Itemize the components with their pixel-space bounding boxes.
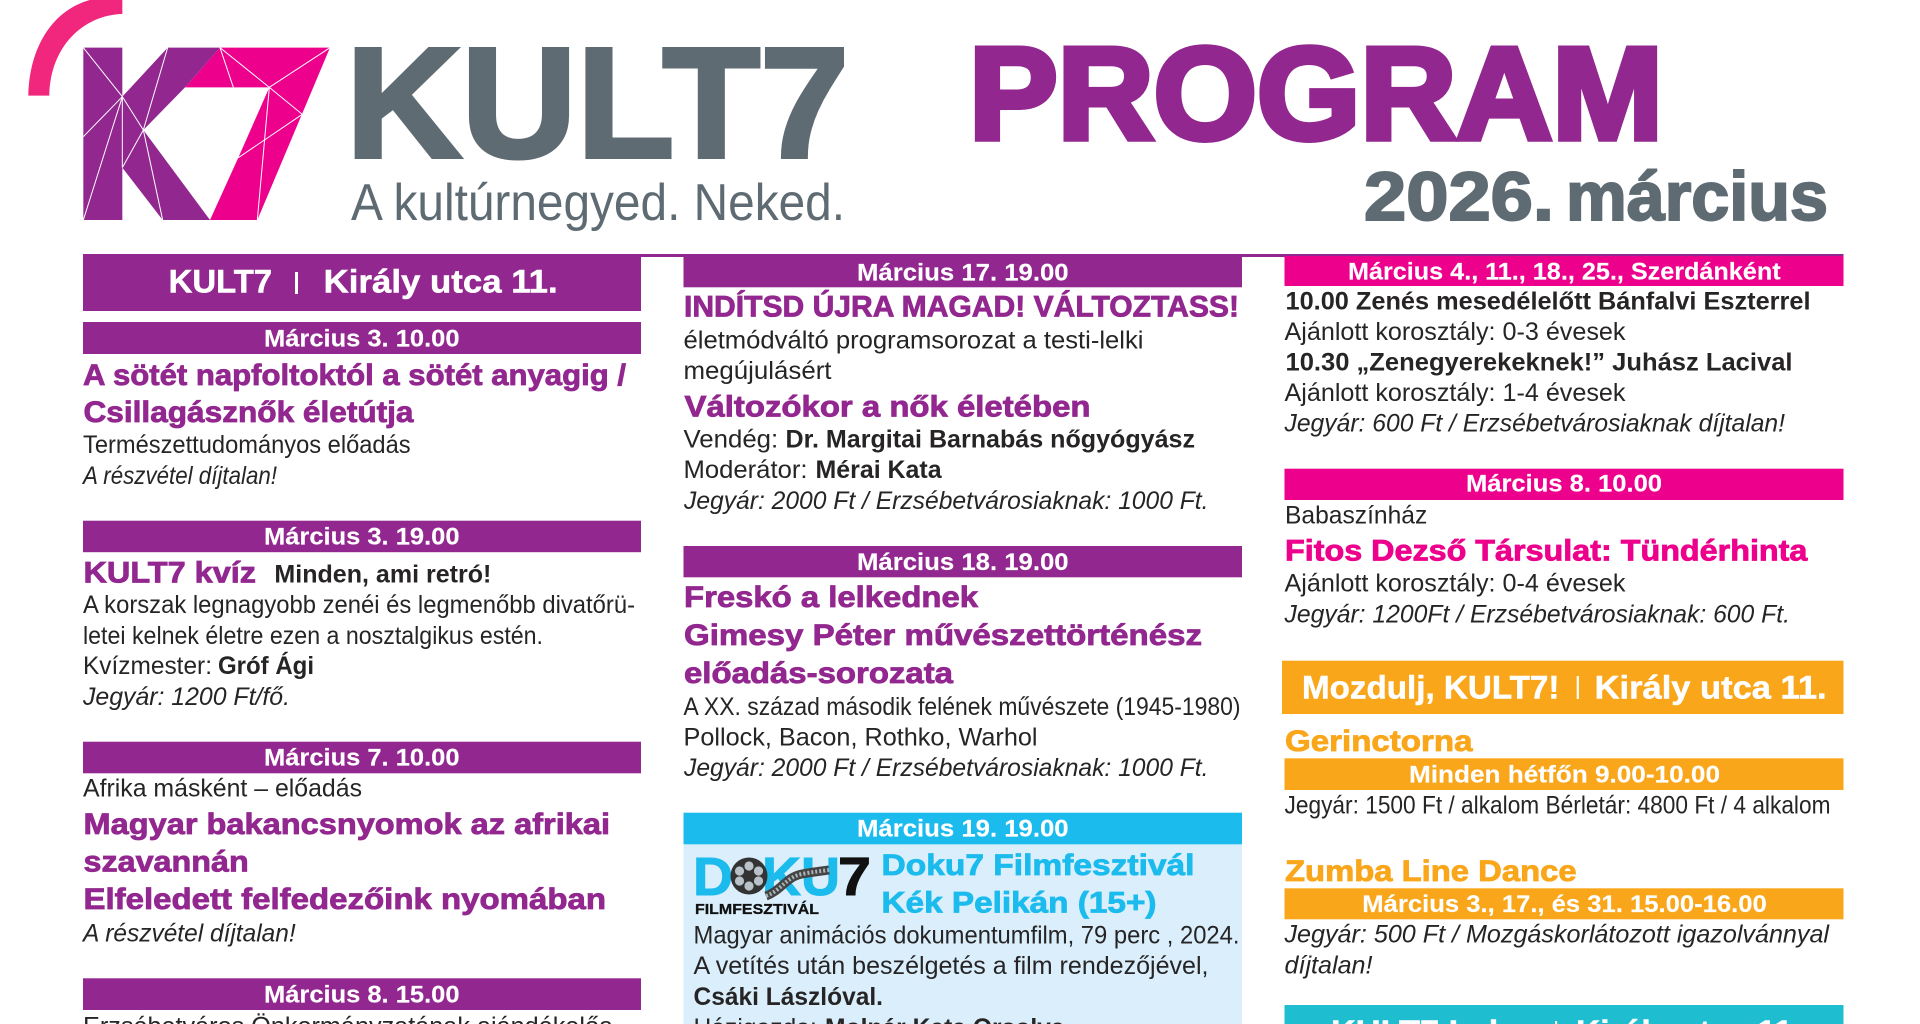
event: március 7. 10.00: Elfeledett felfedezőink nyomában [84,883,606,916]
event: március 17. 19.00: Március 17. 19.00 [857,260,1069,287]
venue header: Király utca 11. [324,264,558,300]
event: március 19. 19.00 Doku7 [684,813,1242,1024]
event: március 3. 10.00: A sötét napfoltoktól a sötét anyagig / [83,359,627,392]
event: szerdánként: Ajánlott korosztály: 0-3 évesek [1284,318,1626,346]
top rule [83,254,1844,257]
event: március 3. 19.00: Március 3. 19.00 [264,524,460,551]
panel: column 1 KULT7 programs [81,254,641,1024]
icon: Doku7 film festival logo: KU [762,847,840,907]
event: szerdánként: 10.30 „Zenegyerekeknek!” Juhász Lacival [1286,349,1792,377]
event: március 17. 19.00: Moderátor: [684,456,808,484]
event: szerdánként: 10.00 Zenés mesedélelőtt Bánfalvi Eszterrel [1286,287,1810,315]
event: Gerinctorna [1284,725,1844,819]
event: március 17. 19.00: Jegyár: 2000 Ft / Erzsébetvárosiaknak: 1000 Ft. [683,487,1208,515]
event: március 18. 19.00: Jegyár: 2000 Ft / Erzsébetvárosiaknak: 1000 Ft. [683,754,1208,782]
event: március 19. 19.00 Doku7: Kék Pelikán (15+) [882,887,1156,920]
event: március 8. 10.00: Jegyár: 1200Ft / Erzsébetvárosiaknak: 600 Ft. [1284,600,1790,628]
event: március 3. 19.00: Gróf Ági [218,651,314,680]
event: szerdánként: Jegyár: 600 Ft / Erzsébetvárosiaknak díjtalan! [1284,410,1785,438]
event: Zumba Line Dance: díjtalan! [1284,951,1373,979]
venue header [83,254,641,311]
event: március 3. 10.00: Csillagásznők életútja [84,396,414,429]
icon: Doku7 film festival logo [693,847,871,918]
title: PROGRAM: PROGRAM [969,20,1663,167]
event: március 7. 10.00: Március 7. 10.00 [264,745,460,772]
section header: Mozdulj, KULT7!: Mozdulj, KULT7! [1302,669,1559,705]
event: Zumba Line Dance: Jegyár: 500 Ft / Mozgáskorlátozott igazolvánnyal [1283,921,1830,949]
event: Zumba Line Dance: Március 3., 17., és 31. 15.00-16.00 [1362,891,1767,918]
panel: column 2 programs [683,254,1242,1024]
section header: KULT7 Labor [1284,1005,1844,1024]
event: Gerinctorna: Jegyár: 1500 Ft / alkalom Bérletár: 4800 Ft / 4 alkalom [1284,791,1830,819]
event: március 3. 19.00: Jegyár: 1200 Ft/fő. [82,683,290,711]
event: március 19. 19.00 Doku7: Csáki Lászlóval. [694,983,883,1011]
event: március 3. 19.00: Minden, ami retró! [274,560,491,588]
event: szerdánként [1284,256,1844,438]
event: március 7. 10.00: Magyar bakancsnyomok az afrikai [84,808,610,841]
logo tagline: A kultúrnegyed. Neked. [351,174,845,232]
event: március 18. 19.00: Freskó a lelkednek [684,581,978,614]
event: szerdánként: Március 4., 11., 18., 25., Szerdánként [1348,258,1781,285]
event: március 3. 19.00: KULT7 kvíz [84,556,256,589]
event: március 19. 19.00 Doku7: Március 19. 19.00 [857,816,1069,843]
event: március 17. 19.00: Mérai Kata [816,456,943,484]
subtitle: 2026. március: március [1566,158,1828,235]
event: március 17. 19.00: megújulásért [684,357,832,385]
event: március 7. 10.00: Afrika másként – előadás [83,775,362,803]
event: Zumba Line Dance [1283,855,1844,979]
event: március 8. 10.00: Babaszínház [1285,501,1427,529]
event: március 8. 10.00: Fitos Dezső Társulat: Tündérhinta [1285,535,1808,568]
event: március 17. 19.00: INDÍTSD ÚJRA MAGAD! VÁLTOZTASS! [684,290,1239,324]
event: március 18. 19.00: előadás-sorozata [684,657,953,690]
event: március 18. 19.00: Március 18. 19.00 [857,549,1069,576]
event: március 7. 10.00: A részvétel díjtalan! [81,920,296,948]
icon: Doku7 film festival logo: 7 [838,847,871,907]
event: március 17. 19.00: Dr. Margitai Barnabás nőgyógyász [786,426,1195,454]
event: március 3. 19.00 [82,521,641,711]
event: Gerinctorna: Minden hétfőn 9.00-10.00 [1409,761,1720,788]
event: március 8. 10.00 [1284,469,1844,628]
event: március 18. 19.00: Gimesy Péter művészettörténész [684,619,1202,652]
event: március 3. 19.00: Kvízmester: [83,652,212,680]
subtitle: 2026. március: 2026. [1364,158,1554,235]
event: március 3. 19.00: letei kelnek életre ezen a nosztalgikus estén. [83,622,543,650]
event: március 17. 19.00: Változókor a nők életében [684,391,1090,424]
logo wordmark: KULT7: KULT7 [346,16,849,191]
event: március 17. 19.00: életmódváltó programsorozat a testi-lelki [684,326,1144,354]
event: március 18. 19.00: Pollock, Bacon, Rothko, Warhol [684,724,1038,752]
event: március 17. 19.00: Vendég: [684,426,778,454]
event: március 3. 19.00: A korszak legnagyobb zenéi és legmenőbb divatőrü- [83,591,635,619]
event: március 19. 19.00 Doku7: A vetítés után beszélgetés a film rendezőjével, [694,952,1208,980]
event: március 19. 19.00 Doku7: Magyar animációs dokumentumfilm, 79 perc , 2024. [694,921,1240,949]
section header: Mozdulj, KULT7! [1282,661,1844,714]
event: március 3. 10.00: Március 3. 10.00 [264,326,460,353]
event: Gerinctorna: Gerinctorna [1285,725,1473,758]
event: március 19. 19.00 Doku7: Doku7 Filmfesztivál [882,849,1194,882]
event: március 18. 19.00: A XX. század második felének művészete (1945-1980) [684,693,1240,721]
event: március 8. 10.00: Ajánlott korosztály: 0-4 évesek [1284,570,1626,598]
event: március 7. 10.00 [81,742,641,948]
section header: Mozdulj, KULT7!: Király utca 11. [1595,669,1827,705]
panel: column 3 programs [1282,256,1844,1024]
event: március 7. 10.00: szavannán [84,846,249,879]
event: március 3. 10.00 [81,322,641,490]
event: március 3. 10.00: Természettudományos előadás [83,431,411,459]
icon: Doku7 film festival logo: FILMFESZTIVÁL [695,901,819,918]
event: március 8. 15.00: Március 8. 15.00 [264,981,460,1008]
event: március 3. 10.00: A részvétel díjtalan! [81,462,277,490]
logo: K7 mark [28,0,330,220]
event: szerdánként: Ajánlott korosztály: 1-4 évesek [1284,379,1626,407]
venue header: KULT7 [169,264,272,300]
event: Zumba Line Dance: Zumba Line Dance [1285,855,1577,888]
event: március 8. 15.00 [83,978,641,1024]
event: március 17. 19.00 [683,254,1242,515]
event: március 8. 10.00: Március 8. 10.00 [1466,471,1662,498]
subtitle: 2026. március [1364,158,1828,235]
icon: Doku7 film festival logo: D [693,847,733,907]
event: március 18. 19.00 [683,546,1242,782]
